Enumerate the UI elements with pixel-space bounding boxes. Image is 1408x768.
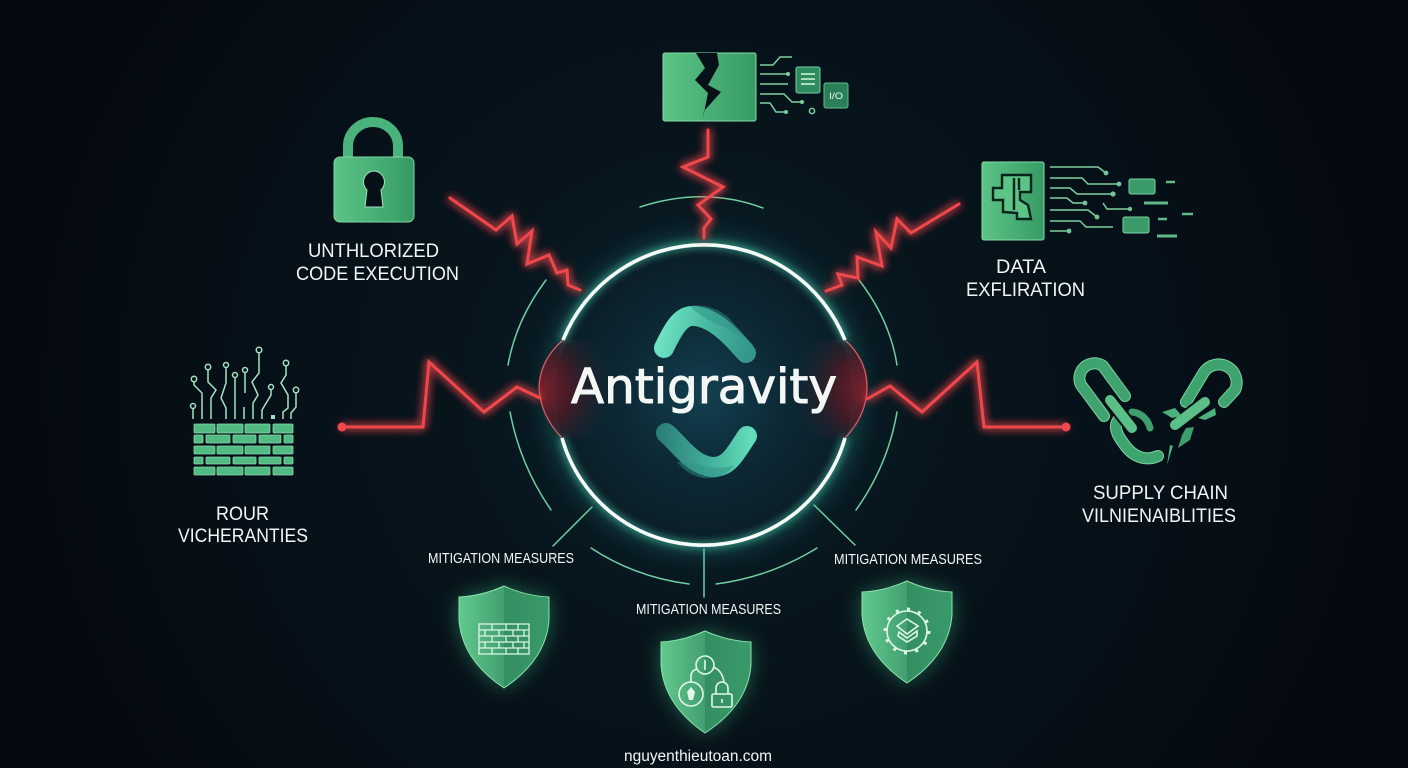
mitigation 3: label: MITIGATION MEASURES	[834, 552, 982, 568]
outer thin orbit arcs	[508, 197, 897, 597]
central hub: Antigravity	[539, 235, 867, 555]
label: supply chain vulnerabilities	[1082, 483, 1236, 527]
mitigation 2: label: MITIGATION MEASURES	[636, 602, 781, 618]
logo swoosh: top	[664, 306, 754, 353]
icon: data card with circuit	[982, 162, 1193, 240]
label: data exfiltration: EXFLIRATION	[966, 280, 1085, 301]
label: router vulnerabilities	[178, 504, 308, 547]
icon: cracked document with circuit	[663, 53, 848, 121]
label: data exfiltration	[966, 257, 1085, 301]
label: router vulnerabilities: VICHERANTIES	[178, 526, 308, 547]
logo swoosh: bottom	[666, 433, 747, 478]
label: unauthorized code execution: CODE EXECUTION	[296, 264, 459, 285]
red lightning connectors	[342, 130, 1066, 427]
label: unauthorized code execution: UNTHLORIZED	[308, 241, 439, 262]
icon: firewall with circuit traces	[190, 347, 299, 475]
mitigation 1: shield with brick wall	[459, 586, 549, 688]
label: supply chain vulnerabilities: VILNIENAIBLITIES	[1082, 506, 1236, 527]
title: Antigravity	[571, 359, 837, 415]
mitigation 3: shield with gear	[862, 581, 952, 683]
connector end dots	[338, 422, 1070, 432]
icon: broken chain	[1079, 363, 1237, 465]
label: data exfiltration: DATA	[996, 257, 1046, 278]
mitigation 2: shield with lock network	[661, 631, 751, 733]
label: unauthorized code execution	[296, 241, 459, 285]
icon: padlock	[334, 122, 414, 222]
icon: cracked document with circuit: I/O	[829, 91, 843, 101]
footer: website: nguyenthieutoan.com	[624, 748, 772, 765]
mitigation 1: label: MITIGATION MEASURES	[428, 551, 574, 567]
label: supply chain vulnerabilities: SUPPLY CHAIN	[1093, 483, 1228, 504]
label: router vulnerabilities: ROUR	[216, 504, 269, 525]
